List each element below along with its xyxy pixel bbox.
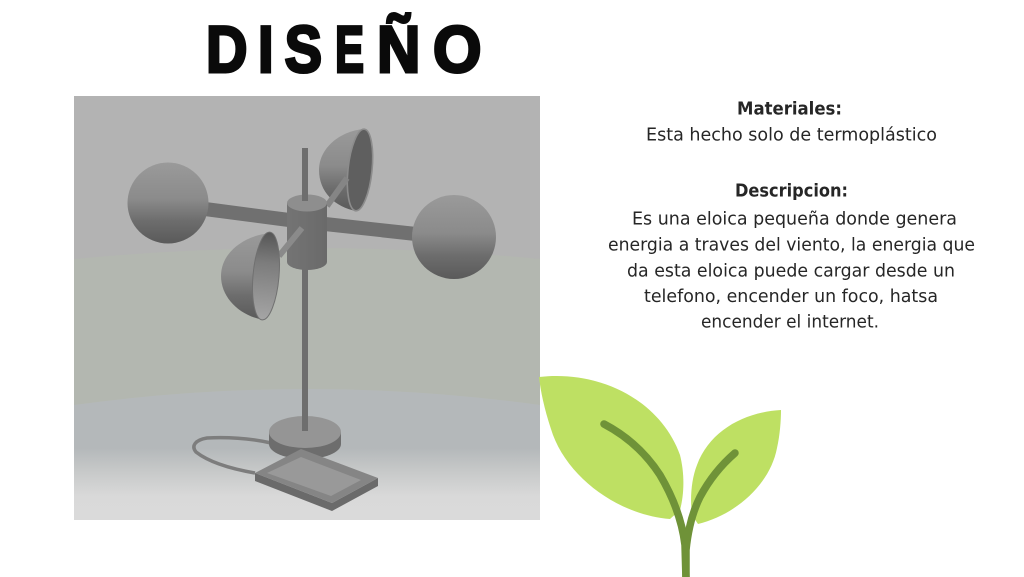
materiales body: Esta hecho solo de termoplástico: [646, 126, 937, 146]
text block: descripcion: [608, 182, 975, 332]
upper cup: [319, 128, 376, 212]
title: E: [335, 12, 364, 86]
descripcion body: Es una eloica pequeña donde genera: [632, 210, 957, 230]
round base: [269, 405, 341, 459]
descripcion body: energia a traves del viento, la energia que: [608, 236, 975, 256]
text block: materiales: [646, 100, 937, 146]
descripcion body: [608, 210, 975, 332]
hub cylinder: [287, 190, 327, 270]
title: S: [285, 13, 322, 86]
stem: [604, 424, 735, 577]
title: D: [206, 13, 247, 87]
title: Ñ: [377, 12, 420, 87]
control panel: [255, 449, 378, 511]
image background: [74, 96, 540, 520]
illustration: wind turbine render: [74, 96, 540, 520]
title: O: [433, 12, 482, 86]
icon: green sprout: [539, 376, 781, 577]
cable: [194, 438, 271, 473]
left leaf: [539, 376, 683, 519]
title: [206, 12, 482, 87]
right leaf: [691, 410, 781, 524]
descripcion body: da esta eloica puede cargar desde un: [627, 262, 955, 282]
descripcion body: encender el internet.: [701, 312, 879, 332]
heading: descripcion: Descripcion:: [735, 182, 848, 202]
right arm and sphere: [325, 195, 496, 279]
descripcion body: telefono, encender un foco, hatsa: [644, 287, 938, 307]
pole: [302, 148, 308, 430]
heading: materiales: Materiales:: [737, 100, 842, 120]
left arm and sphere: [128, 162, 289, 244]
lower cup: [221, 228, 302, 321]
title: I: [258, 13, 274, 86]
